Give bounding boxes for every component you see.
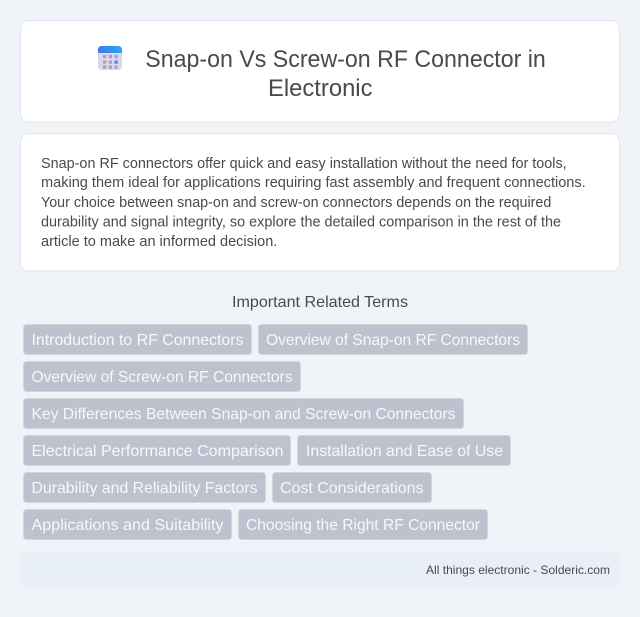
tag [24, 472, 266, 502]
tag [24, 510, 232, 540]
tag: Introduction to RF Connectors [32, 332, 244, 349]
panel: header [20, 20, 620, 122]
tag: Choosing the Right RF Connector [246, 517, 481, 534]
tag: Overview of Snap-on RF Connectors [266, 332, 520, 349]
text block: description: Snap-on RF connectors offer quick and easy installation without the need for tools, [41, 156, 567, 172]
tag [272, 472, 432, 502]
text block: description [41, 156, 586, 250]
footer credit: All things electronic - Solderic.com [426, 563, 610, 577]
panel: description [20, 134, 620, 271]
tag: Electrical Performance Comparison [32, 443, 284, 460]
footer [20, 553, 620, 586]
tag [24, 324, 252, 354]
tag [24, 398, 464, 428]
tags: related terms [24, 324, 528, 540]
icon: calendar [98, 46, 122, 70]
tag [258, 324, 528, 354]
tag: Key Differences Between Snap-on and Screw-on Connectors [32, 406, 456, 423]
tag: Durability and Reliability Factors [32, 480, 258, 497]
tag: Applications and Suitability [32, 517, 224, 534]
tag [298, 436, 510, 466]
title: Snap-on Vs Screw-on RF Connector in [145, 46, 546, 73]
tag: Installation and Ease of Use [306, 443, 503, 460]
tag [24, 362, 300, 392]
tag [24, 436, 290, 466]
tag: Cost Considerations [280, 480, 424, 497]
text block: description: Your choice between snap-on and screw-on connectors depends on the required [41, 195, 551, 211]
title [145, 46, 546, 102]
tag [238, 510, 488, 540]
text block: description: making them ideal for applications requiring fast assembly and frequent connections. [41, 175, 586, 191]
heading: related terms: Important Related Terms [232, 294, 408, 311]
tag: Overview of Screw-on RF Connectors [32, 369, 292, 386]
text block: description: durability and signal integrity, so explore the detailed comparison in the rest of the [41, 214, 561, 230]
text block: description: article to make an informed decision. [41, 234, 277, 250]
title: Electronic [268, 75, 372, 102]
